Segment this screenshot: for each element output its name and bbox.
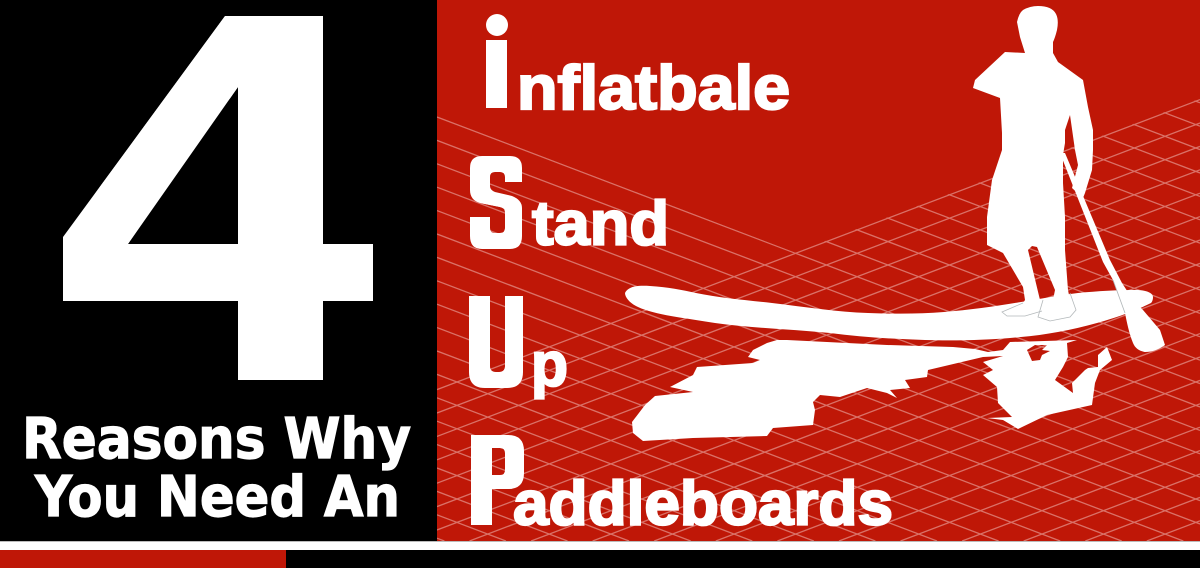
feet outlines: [1002, 293, 1076, 321]
title word: Paddleboards: P: [463, 409, 524, 553]
title word: Inflatbale: [486, 14, 789, 111]
title word: Stand: tand: [532, 190, 669, 258]
paddle: [1060, 153, 1165, 352]
title word: Inflatbale: nflatbale: [517, 54, 790, 123]
panel: red right panel: [437, 0, 1200, 553]
heading: Reasons Why You Need An: You Need An: [34, 465, 400, 530]
panel: black left panel: [0, 0, 437, 541]
title word: Stand: [470, 156, 666, 249]
board: [625, 286, 1153, 340]
icon: paddler silhouette on board: [625, 6, 1165, 441]
title word: Paddleboards: [471, 435, 892, 526]
title word: Paddleboards: addleboards: [513, 470, 893, 538]
title word: Up: p: [531, 330, 568, 400]
heading: Reasons Why You Need An: [22, 407, 411, 530]
heading: Reasons Why You Need An: Reasons Why: [22, 407, 411, 472]
reflection: [632, 340, 1112, 441]
footer bar: [0, 541, 1200, 568]
title word: Stand: S: [466, 130, 522, 273]
paddle edge lines: [1113, 280, 1125, 313]
title word: Up: U: [463, 272, 526, 415]
person: [973, 6, 1093, 321]
title word: Up: [469, 296, 567, 400]
